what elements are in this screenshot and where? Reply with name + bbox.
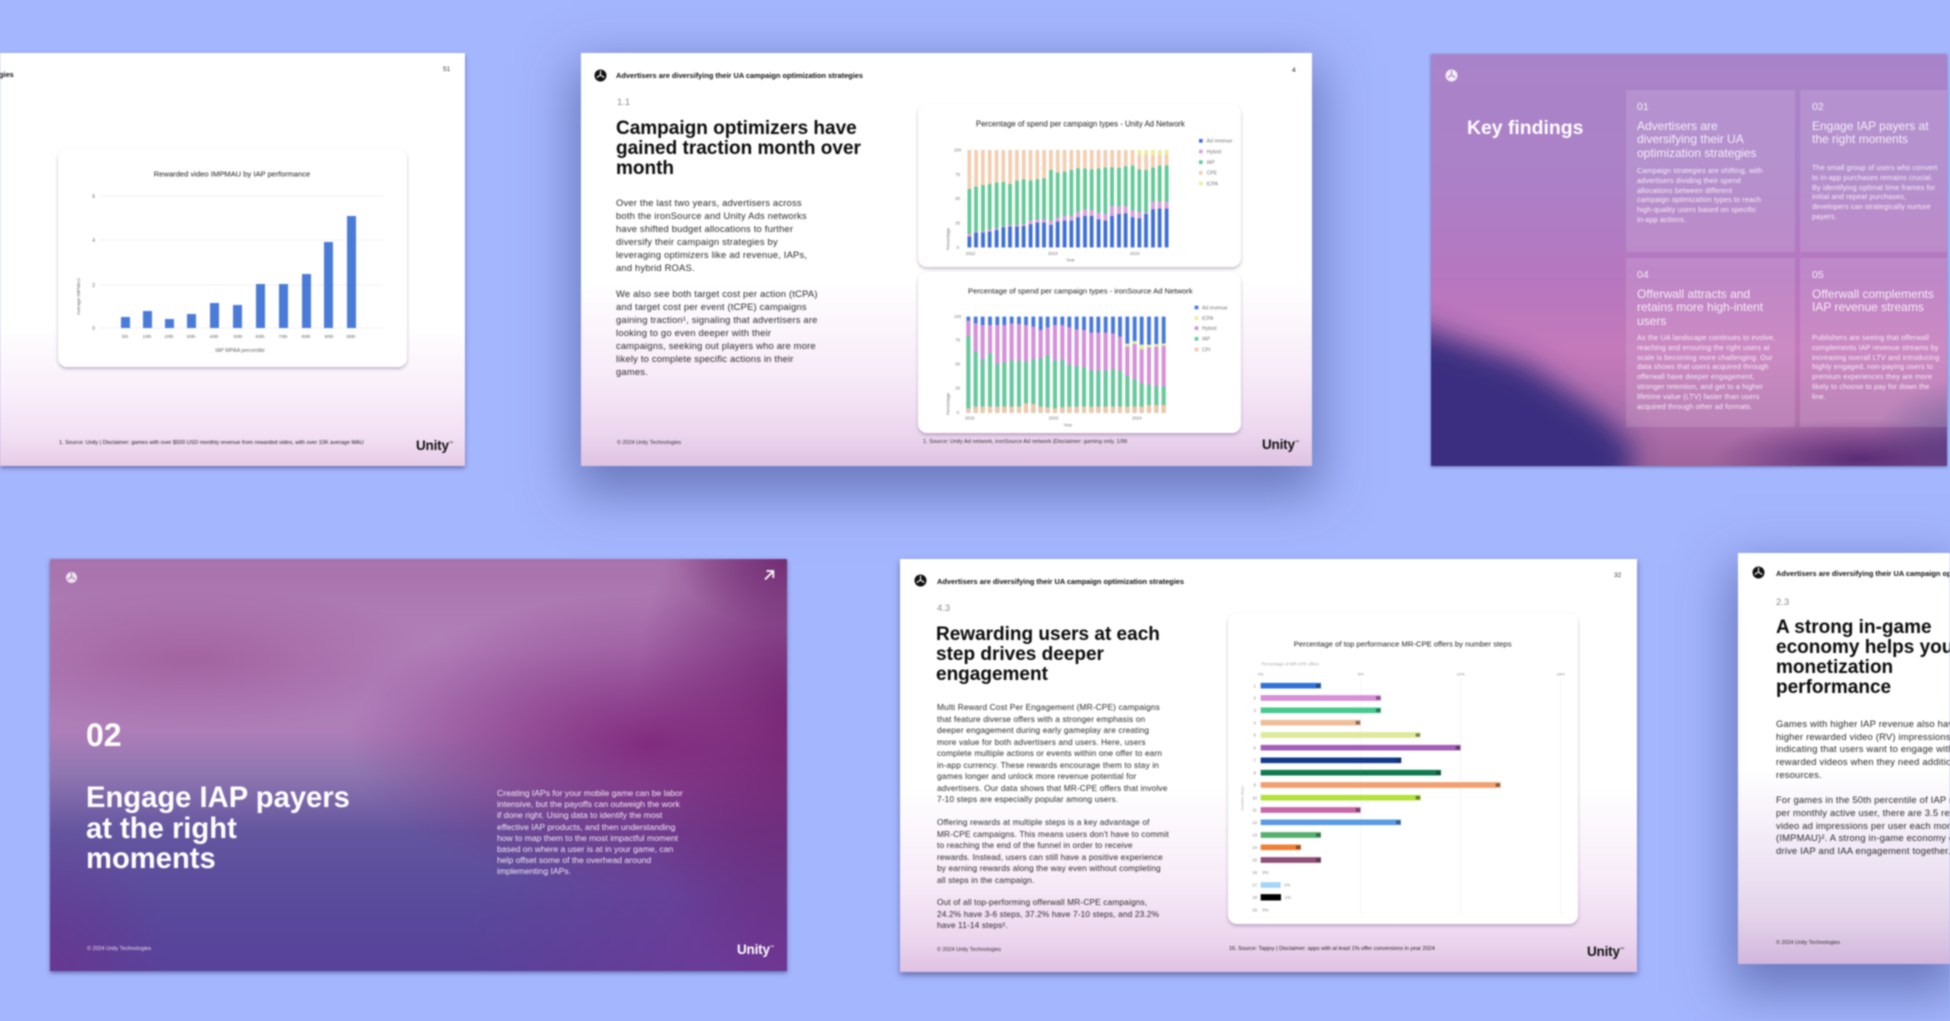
card 05 [1800, 258, 1950, 427]
heading [1776, 617, 1950, 698]
chart title: Rewarded video IMPMAU by IAP performance [154, 170, 310, 178]
small value labels: 1% [1285, 895, 1291, 900]
body text: likely to complete specific actions in their [616, 353, 794, 364]
card 04: users [1637, 314, 1666, 328]
body paragraph 1 [936, 702, 1168, 804]
axes labels: 25 [955, 220, 961, 225]
footnote: 1. Source: Unity | Disclaimer: games with over $500 USD monthly revenue from rewarded video, with over 10K average MAU [59, 440, 364, 446]
page number: 4 [1292, 67, 1296, 74]
icon: arrow [764, 569, 776, 581]
y axis ticks: 4 [92, 238, 95, 244]
x axis labels: 20th [165, 334, 174, 339]
top axis [1258, 671, 1565, 676]
body text: higher rewarded video (RV) impressions, [1776, 731, 1950, 742]
axes labels: 75 [955, 338, 961, 343]
card: horizontal bar chart [1228, 613, 1578, 924]
icon: logo [1444, 68, 1458, 82]
card 01: Campaign strategies are shifting, with [1637, 166, 1762, 175]
card 02: initial and repeat purchases, [1812, 192, 1906, 201]
section number: 1.1 [617, 97, 630, 108]
step labels: 9 [1253, 783, 1256, 788]
axes labels: 75 [955, 172, 961, 177]
slide: rewarded video chart [0, 53, 465, 466]
card 01: high-quality users based on specific [1637, 205, 1756, 214]
card 01: advertisers dividing their spend [1637, 176, 1741, 185]
card 04: stronger retention, and get to a higher [1637, 382, 1763, 391]
heading: Key findings [1467, 117, 1583, 139]
footer copyright: © 2024 Unity Technologies [617, 440, 681, 446]
step labels: 4 [1253, 720, 1256, 725]
x axis labels: 95th [347, 334, 356, 339]
axes labels [946, 147, 1140, 263]
card 04: reaching and ensuring the right users at [1637, 343, 1770, 352]
card 02: to in-app purchases remains crucial. [1812, 173, 1933, 182]
card 02: The small group of users who convert [1812, 163, 1937, 172]
footnote: 1. Source: Unity Ad network, ironSource Ad network |Disclaimer: gaming only, 1/96 [923, 439, 1127, 445]
card 05: 05 [1812, 269, 1824, 281]
body text: how to map them to the most impactful moment [497, 833, 678, 843]
section number: 4.3 [937, 603, 950, 614]
x axis labels [122, 334, 356, 339]
body paragraph 2: all steps in the campaign. [937, 874, 1035, 884]
heading: gained traction month over [616, 138, 861, 159]
axes labels: 2024 [1132, 416, 1142, 421]
bars [1261, 686, 1501, 897]
blue series [969, 209, 1167, 247]
body paragraph 2: MR-CPE campaigns. This means users don't have to commit [937, 828, 1169, 838]
legend: CPE [1207, 171, 1218, 177]
axes labels: 2022 [965, 416, 975, 421]
heading: Engage IAP payers [86, 782, 350, 814]
card: horizontal bar chart: Number steps [1240, 786, 1245, 811]
body paragraph 1: Multi Reward Cost Per Engagement (MR-CPE) campaigns [937, 702, 1160, 712]
card 05: Offerwall complements [1812, 287, 1934, 301]
x axis labels: 30th [187, 334, 196, 339]
step labels: 15 [1252, 858, 1258, 863]
axes labels: 2023 [1048, 251, 1058, 256]
body text: and hybrid ROAS. [616, 262, 695, 273]
body text [496, 788, 684, 876]
body paragraph 1: in-app currency. These rewards encourage them to stay in [937, 760, 1159, 770]
blue series [968, 317, 1164, 413]
card 04: acquired through other ad formats. [1637, 402, 1752, 411]
y axis ticks: 6 [92, 194, 95, 200]
body text: intensive, but the payoffs can outweigh the work [497, 799, 680, 809]
chart title: Percentage of spend per campaign types - Unity Ad Network [976, 120, 1185, 129]
body text [1775, 718, 1950, 857]
legend: Ad revenue [1202, 305, 1228, 311]
legend: CPI [1202, 347, 1210, 353]
legend: IAP [1207, 160, 1215, 166]
card 02: 02 [1812, 101, 1824, 113]
heading: monetization [1776, 657, 1893, 678]
body text: help offset some of the overhead around [497, 855, 651, 865]
card 05: complements IAP revenue streams by [1812, 343, 1939, 352]
card 01 [1626, 90, 1795, 252]
legend: Hybrid [1202, 326, 1217, 332]
orange series [968, 403, 1164, 413]
axes labels: 2024 [1130, 251, 1140, 256]
legend: IAP [1202, 337, 1211, 343]
card 01: allocations between different [1637, 186, 1732, 195]
card 01: optimization strategies [1637, 146, 1756, 160]
step labels: 1 [1253, 683, 1256, 688]
unity logo: Unity™ [1262, 437, 1299, 452]
x axis labels: 5th [122, 334, 129, 339]
small value labels: 0% [1262, 870, 1269, 875]
body text [615, 197, 818, 378]
footnote: 16. Source: Tapjoy | Disclaimer: apps with at least 1% offer conversions in year 2024 [1229, 946, 1435, 952]
unity logo: Unity™ [737, 942, 774, 957]
section number: 2.3 [1776, 597, 1789, 608]
card 05: increasing overall LTV and introducing [1812, 353, 1939, 362]
card 02 [1800, 90, 1950, 252]
legend: tCPA [1207, 181, 1219, 187]
x axis labels: 70th [279, 334, 288, 339]
footer copyright: © 2024 Unity Technologies [937, 947, 1001, 953]
card 01: 01 [1637, 101, 1649, 113]
card 05: IAP revenue streams [1812, 300, 1924, 314]
header: Advertisers are diversifying their UA campaign optimization strategies [616, 70, 863, 80]
top axis: 5% [1358, 671, 1364, 676]
body paragraph 2: by earning rewards along the way even without completing [937, 863, 1161, 873]
body paragraph 2 [936, 817, 1170, 886]
body paragraph 2: to reaching the end of the funnel in order to receive [937, 840, 1133, 850]
y axis ticks: 2 [92, 283, 95, 289]
step labels: 18 [1252, 895, 1258, 900]
green series [969, 165, 1167, 247]
pink series [968, 321, 1164, 413]
card 01: Advertisers are [1637, 119, 1718, 133]
body paragraph 3: Out of all top-performing offerwall MR-CPE campaigns, [937, 897, 1147, 907]
heading [616, 118, 862, 179]
x axis labels: 40th [210, 334, 219, 339]
body text: based on where a user is at in your game, can [497, 844, 673, 854]
step labels: 5 [1253, 733, 1256, 738]
x axis labels: 80th [302, 334, 311, 339]
heading: at the right [86, 812, 237, 844]
slide: section 02 cover [50, 559, 787, 971]
chart title: Percentage of top performance MR-CPE offers by number steps [1294, 639, 1512, 648]
card 05: premium experiences they are more [1812, 372, 1932, 381]
body text: leveraging optimizers like ad revenue, IAPs, [616, 249, 807, 260]
yellow series [1139, 150, 1167, 155]
body paragraph 1: advertisers. Our data shows that MR-CPE offers that involve [937, 782, 1168, 792]
body paragraph 1: games longer and unlock more revenue potential for [937, 771, 1136, 781]
card 04: lifetime value (LTV) faster than users [1637, 392, 1760, 401]
step labels: 10 [1252, 795, 1258, 800]
axes labels: 100 [954, 314, 962, 319]
footer copyright: © 2024 Unity Technologies [1776, 940, 1840, 946]
card 04: data shows that users acquired through [1637, 362, 1769, 371]
slide: in-game economy [1738, 553, 1950, 964]
step labels: 16 [1252, 870, 1258, 875]
body paragraph 2: rewards. Instead, users can still have a positive experience [937, 852, 1163, 862]
bar value markers [1296, 686, 1500, 860]
axes labels: 0 [957, 410, 960, 415]
unity logo: Unity™ [416, 438, 453, 453]
top axis: 10% [1457, 671, 1465, 676]
body text: implementing IAPs. [497, 866, 571, 876]
body paragraph 3: 24.2% have 3-6 steps, 37.2% have 7-10 steps, and 23.2% [937, 908, 1159, 918]
card 05: likely to choose to pay for down the [1812, 382, 1930, 391]
card 02: Engage IAP payers at [1812, 119, 1929, 133]
body text: looking to go even deeper with their [616, 327, 771, 338]
card 05: line. [1812, 392, 1826, 401]
body text: resources. [1776, 769, 1822, 780]
body text: if done right. Using data to identify the most [497, 810, 662, 820]
top axis: 0% [1258, 671, 1264, 676]
axes labels [946, 314, 1142, 428]
body text: campaigns, seeking out players who are more [616, 340, 816, 351]
card 01: campaign optimization types to reach [1637, 195, 1761, 204]
card: horizontal bar chart: Percentage of MR-CPE offers [1262, 661, 1319, 666]
axes labels: 2022 [966, 251, 976, 256]
x axis labels: 90th [325, 334, 334, 339]
body paragraph 2: Offering rewards at multiple steps is a key advantage of [937, 817, 1150, 827]
legend [1199, 139, 1232, 187]
body paragraph 1: that feature diverse offers with a stronger emphasis on [937, 714, 1145, 724]
body text: Creating IAPs for your mobile game can be labor [497, 788, 683, 798]
y axis ticks: 0 [92, 326, 95, 332]
body text: have shifted budget allocations to further [616, 223, 793, 234]
page number: 51 [443, 66, 450, 73]
heading: engagement [936, 664, 1048, 685]
axes labels: 50 [955, 196, 961, 201]
card 04 [1626, 258, 1795, 427]
card: Unity Ad Network stacked bars [918, 104, 1241, 267]
card 04: As the UA landscape continues to evolve, [1637, 333, 1775, 342]
body paragraph 1: more value for both advertisers and users. Here, users [937, 736, 1146, 746]
step labels: 8 [1253, 770, 1256, 775]
axes labels: Year [1066, 258, 1075, 263]
yellow series [1127, 341, 1164, 413]
step labels: 17 [1252, 883, 1258, 888]
step labels [1252, 683, 1258, 913]
body text: diversify their campaign strategies by [616, 236, 778, 247]
body paragraph 1: complete multiple actions or events within one offer to earn [937, 748, 1162, 758]
card: bar chart: IAP MPAA percentile [215, 348, 265, 354]
body paragraph 3 [936, 897, 1160, 930]
icon: logo [914, 574, 928, 588]
slide: key findings [1431, 54, 1947, 466]
heading: month [616, 158, 674, 179]
body text: We also see both target cost per action (tCPA) [616, 288, 818, 299]
body text: and target cost per event (tCPE) campaigns [616, 301, 807, 312]
small value labels [1262, 870, 1291, 913]
body text: indicating that users want to engage with [1776, 743, 1950, 754]
card: bar chart: Average IMPMAU [76, 278, 81, 315]
small value labels: 0% [1262, 908, 1269, 913]
legend [1195, 305, 1228, 353]
axes labels: 0 [957, 245, 960, 250]
heading: A strong in-game [1776, 617, 1932, 638]
heading: performance [1776, 677, 1891, 698]
step labels: 6 [1253, 745, 1256, 750]
body text: drive IAP and IAA engagement together. [1776, 845, 1950, 856]
axes labels: Percentage [946, 392, 951, 415]
card 02: payers. [1812, 212, 1837, 221]
step labels: 12 [1252, 820, 1258, 825]
card 02: the right moments [1812, 132, 1908, 146]
orange series [968, 53, 1169, 345]
pink series [969, 202, 1167, 247]
card 04: scale is becoming more challenging. Our [1637, 353, 1773, 362]
heading [86, 782, 350, 875]
card 05: highly engaged, non-paying users to [1812, 362, 1933, 371]
body text: gaining traction¹, signaling that advertisers are [616, 314, 818, 325]
step labels: 3 [1253, 708, 1256, 713]
header: Advertisers are diversifying their UA campaign optimization strategies [937, 576, 1184, 586]
step labels: 19 [1252, 908, 1258, 913]
axes labels: 2023 [1049, 416, 1059, 421]
step labels: 7 [1253, 758, 1256, 763]
body paragraph 1: deeper engagement during early gameplay are creating [937, 725, 1149, 735]
dark gradient blob [1430, 310, 1650, 467]
icon: logo [1752, 566, 1766, 580]
x axis labels: 10th [143, 334, 152, 339]
icon: logo [65, 571, 78, 584]
footer copyright: © 2024 Unity Technologies [87, 946, 151, 952]
card 05: Publishers are seeing that offerwall [1812, 333, 1929, 342]
heading: step drives deeper [936, 644, 1104, 665]
heading: Campaign optimizers have [616, 118, 857, 139]
chart title: Percentage of spend per campaign types - ironSource Ad Network [968, 287, 1193, 296]
x axis labels: 50th [234, 334, 243, 339]
card 02: By identifying optimal time frames for [1812, 183, 1935, 192]
step labels: 2 [1253, 696, 1256, 701]
legend: Ad revenue [1207, 139, 1232, 145]
page number: 32 [1614, 572, 1621, 579]
heading [936, 624, 1160, 685]
legend: Hybrid [1207, 149, 1221, 155]
legend: tCPA [1202, 316, 1214, 322]
card: ironSource Ad Network stacked bars [918, 272, 1241, 433]
body text: games. [616, 366, 648, 377]
step labels: 14 [1252, 845, 1258, 850]
step labels: 13 [1252, 833, 1258, 838]
card: bar chart [58, 149, 407, 367]
green series [968, 336, 1164, 413]
step labels: 11 [1252, 808, 1258, 813]
card 04: Offerwall attracts and [1637, 287, 1750, 301]
axes labels: 50 [955, 361, 961, 366]
card 02: developers can strategically nurture [1812, 202, 1931, 211]
card 01: diversifying their UA [1637, 132, 1744, 146]
heading: Rewarding users at each [936, 624, 1160, 645]
card 04: offerwall have deeper engagement, [1637, 372, 1755, 381]
unity logo: Unity™ [1587, 944, 1624, 959]
slide: campaign optimizers [581, 53, 1312, 466]
axes labels: Year [1063, 423, 1073, 428]
body paragraph 1: 7-10 steps are especially popular among users. [937, 794, 1118, 804]
body text: effective IAP products, and then understanding [497, 822, 675, 832]
icon: logo [594, 68, 608, 82]
axes labels: 100 [954, 147, 962, 152]
top axis: 15% [1557, 671, 1565, 676]
heading: moments [86, 843, 216, 875]
y axis ticks [92, 194, 95, 332]
card 04: 04 [1637, 269, 1649, 281]
body text: Over the last two years, advertisers across [616, 197, 802, 208]
small value labels: 1% [1284, 883, 1290, 888]
card 04: retains more high-intent [1637, 300, 1763, 314]
axes labels: Percentage [946, 227, 951, 250]
bars [121, 216, 356, 328]
slide: rewarding users [900, 559, 1637, 972]
card 01: in-app actions. [1637, 215, 1686, 224]
body text: both the ironSource and Unity Ads networks [616, 210, 807, 221]
x axis labels: 60th [256, 334, 265, 339]
body paragraph 3: have 11-14 steps². [937, 920, 1008, 930]
section number: 02 [86, 717, 122, 753]
axes labels: 25 [955, 386, 961, 391]
